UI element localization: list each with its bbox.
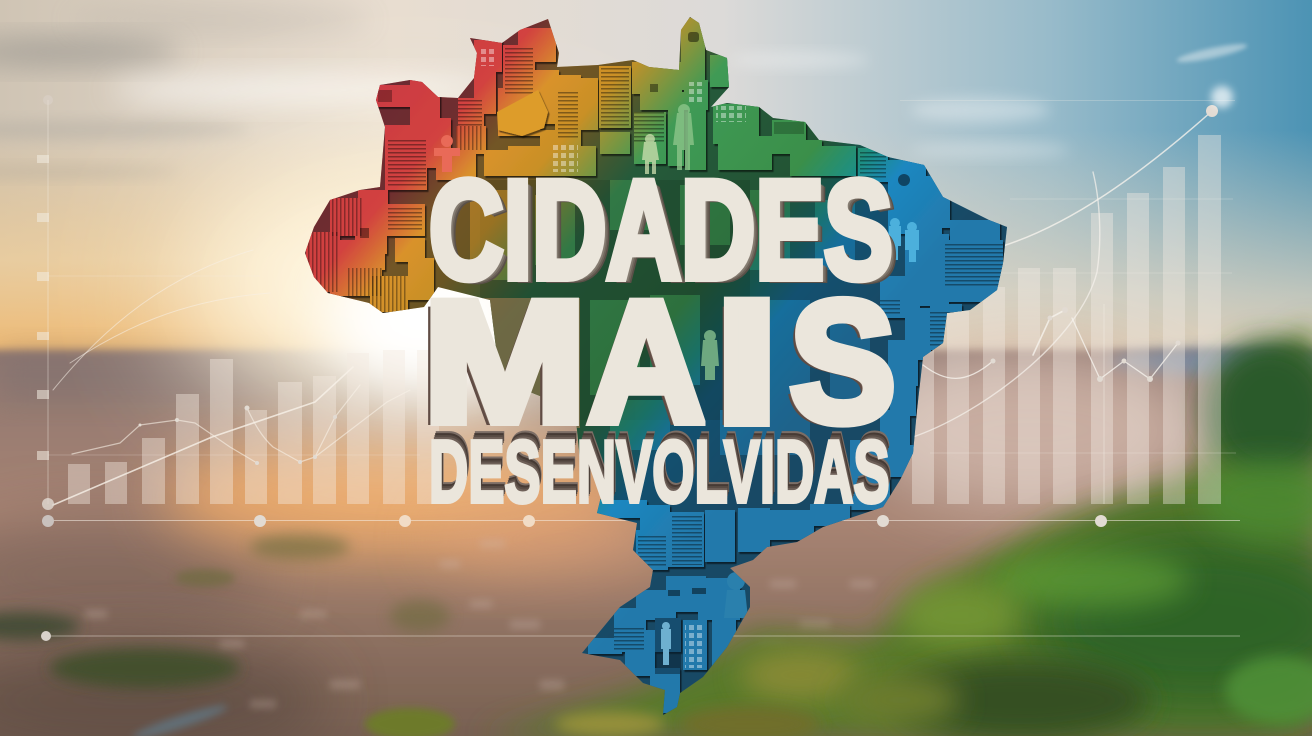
title: Cidades Mais Desenvolvidas: I	[717, 266, 777, 458]
chart: right translucent bars	[912, 135, 1221, 504]
orange building stripes	[456, 46, 578, 172]
blue north-east buildings	[850, 160, 1003, 510]
title line: Cidades: CIDADES	[429, 151, 893, 308]
chart: axis tick labels	[37, 155, 49, 460]
chart: left translucent bars	[68, 350, 439, 504]
icons: people silhouettes	[434, 104, 919, 665]
title line: Mais	[423, 266, 896, 458]
red building stripes	[306, 90, 426, 312]
title line: Desenvolvidas: DESENVOLVIDAS	[429, 422, 890, 521]
red buildings	[306, 80, 451, 312]
title: Cidades Mais Desenvolvidas: M	[423, 266, 586, 458]
green building details	[601, 32, 886, 180]
icon: orange hand	[497, 90, 548, 136]
green buildings	[599, 18, 888, 182]
title: Cidades Mais Desenvolvidas: S	[790, 266, 896, 458]
chart: right trend lines	[910, 111, 1212, 438]
title: Cidades Mais Desenvolvidas: A	[588, 266, 705, 458]
map base shading	[300, 10, 1020, 720]
background: green forest hillside	[480, 325, 1312, 736]
orange buildings	[436, 28, 598, 180]
background: sun glow	[180, 145, 640, 425]
blue south buildings	[588, 500, 850, 713]
chart: data point markers	[41, 95, 1218, 641]
background: blurred city ground	[0, 348, 1312, 736]
background: sunset sky	[0, 0, 1312, 365]
chart: glowing top point	[1211, 86, 1233, 108]
chart: left trend lines	[53, 250, 410, 505]
chart: axes and grid lines	[46, 100, 1240, 636]
title: Cidades Mais Desenvolvidas	[423, 151, 896, 521]
blue building stripes	[880, 174, 1003, 348]
brazil map made of buildings	[300, 10, 1020, 720]
blue south building details	[614, 515, 706, 674]
center buildings behind the title	[470, 180, 870, 455]
